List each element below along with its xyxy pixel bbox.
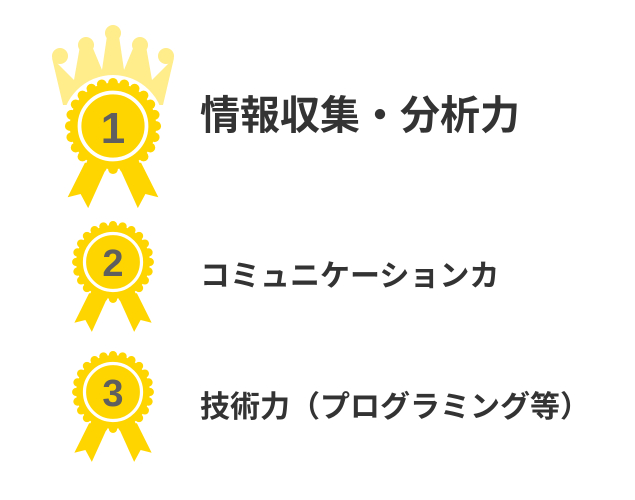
text: rank 3: 技術力（プログラミング等） <box>200 391 590 424</box>
icon: medal 1: 1 <box>101 104 125 153</box>
icon: medal 2 <box>72 221 154 332</box>
icon: medal 1 <box>62 75 164 208</box>
text: rank 2: コミュニケーションカ <box>200 260 499 293</box>
heading: rank 1: 情報収集・分析力 <box>200 94 520 138</box>
icon: medal 3: 3 <box>102 373 124 415</box>
icon: medal 2: 2 <box>102 243 124 285</box>
icon: crown <box>52 25 174 105</box>
icon: medal 3 <box>72 351 154 462</box>
